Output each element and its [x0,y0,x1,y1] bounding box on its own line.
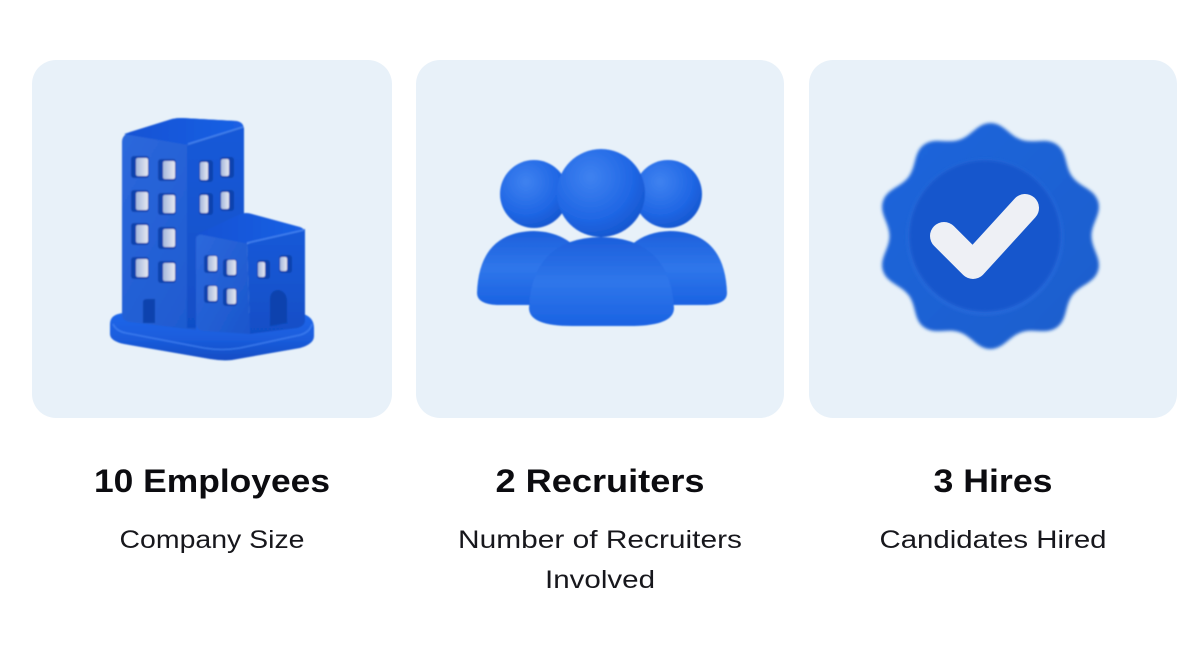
heading: 2 Recruiters [496,463,704,499]
caption: Candidates Hired [880,526,1106,554]
caption line 2: Involved [545,566,655,594]
panel: recruiters [416,60,784,418]
windows: tall building side [199,157,234,215]
stat: employees [94,463,330,554]
windows: small building [204,255,292,306]
checkmark [944,208,1025,265]
back right person [614,160,727,305]
icon: office buildings [110,118,314,360]
windows: tall building front [131,156,176,283]
stat: hires [880,463,1106,554]
heading: 3 Hires [934,463,1052,499]
caption: Number of Recruiters [458,526,742,554]
front person [529,149,674,326]
icon: verified badge [882,123,1099,349]
back left person [477,160,590,305]
heading: 10 Employees [94,463,330,499]
panel: company size [32,60,392,418]
stat: recruiters [458,463,742,594]
caption: Company Size [120,526,304,554]
doors [143,290,287,326]
panel: hires [809,60,1177,418]
icon: group of people [477,149,727,326]
